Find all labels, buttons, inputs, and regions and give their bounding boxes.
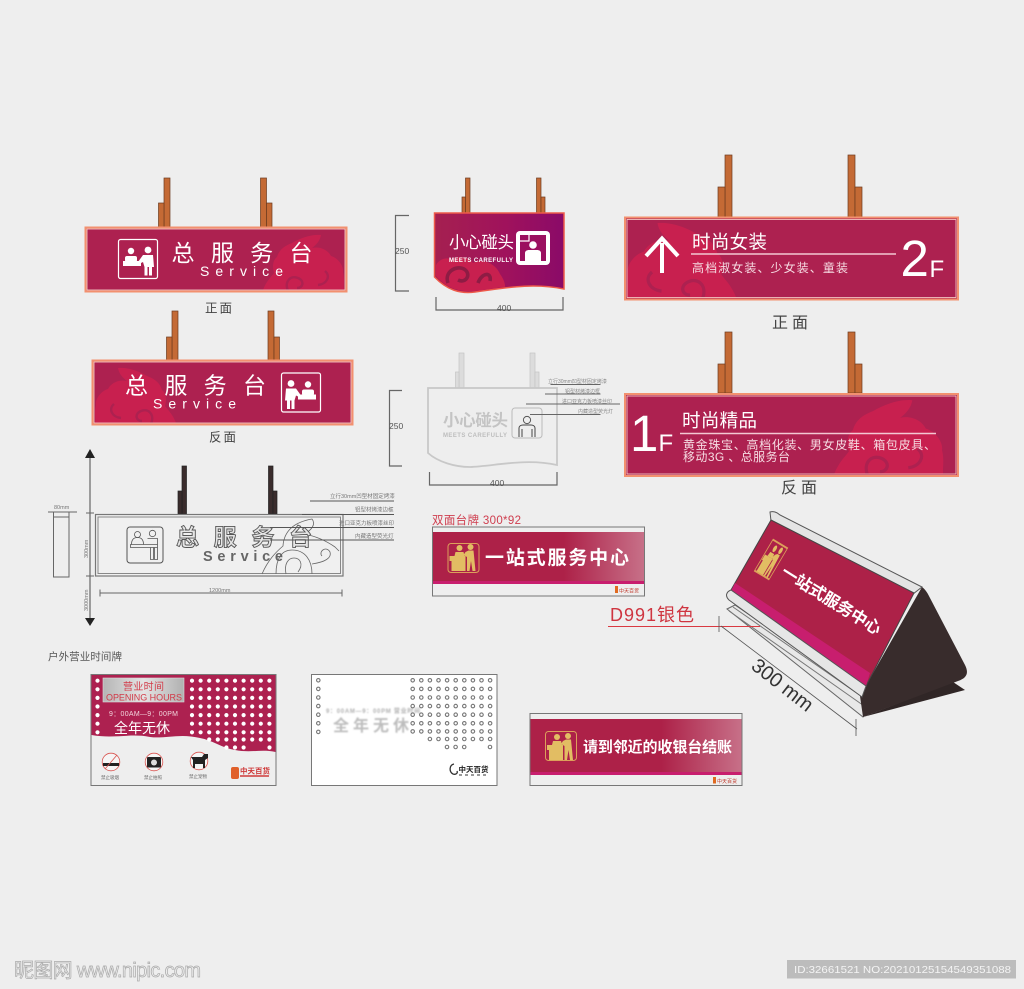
cloud outline: [262, 519, 339, 574]
base rails: [727, 605, 875, 717]
width bracket: [430, 472, 557, 485]
table sign text: 一站式服务中心: [485, 547, 629, 569]
width label: 400: [497, 303, 511, 313]
height label: 250: [389, 421, 403, 431]
red area: [92, 675, 276, 752]
red band: [433, 532, 644, 581]
frame: [432, 527, 644, 596]
callout 1: 立行30mm凹型材固定烤漆: [330, 492, 395, 500]
icon: bump head: [516, 231, 550, 265]
board: [91, 674, 276, 786]
back caption: 反面: [781, 479, 817, 497]
sign board: [86, 228, 346, 292]
outlined heading: 总服务台: [176, 524, 312, 550]
panel: table sign nearest cashier: [530, 714, 742, 786]
silver title box: [103, 678, 184, 702]
posts: [456, 353, 539, 388]
posts: [158, 178, 272, 227]
hollow dots: [318, 680, 493, 747]
heading: outdoor hours sign: 户外营业时间牌: [48, 650, 122, 663]
logo: [713, 777, 737, 785]
no camera label: 禁止拍照: [144, 774, 162, 781]
sign title: 小心碰头: [449, 233, 514, 252]
watermark: image id: [787, 960, 1016, 978]
logo: [231, 766, 270, 779]
dimension 3000mm: 3000mm: [84, 589, 90, 611]
outline board: [96, 514, 343, 576]
icon: outline bump: [512, 408, 542, 438]
faded hours: 9：00AM—9：00PM 营业时间: [326, 707, 420, 715]
panel: triangular table sign 3D: [608, 512, 967, 736]
floor letter: F: [658, 430, 673, 457]
sign heading: 总服务台: [172, 240, 312, 266]
hours title english: OPENING HOURS: [106, 692, 182, 702]
outline title: 小心碰头: [443, 411, 508, 430]
sign board: [92, 360, 352, 424]
icon: up arrow: [646, 238, 678, 273]
height arrow: [85, 449, 95, 626]
logo: [615, 586, 639, 594]
floor number: 1: [630, 405, 658, 462]
floor title: 时尚女装: [692, 232, 767, 252]
outline subtitle: MEETS CAREFULLY: [443, 433, 507, 439]
board: [312, 674, 497, 786]
front caption: 正面: [205, 302, 232, 316]
logo: 中天百货: [458, 764, 489, 774]
red leader line: [608, 626, 760, 628]
logo: [450, 764, 489, 775]
icon: outline service desk: [127, 527, 163, 563]
panel: mind your head sign: [395, 178, 564, 313]
red face: [731, 520, 914, 686]
cloud pattern: [95, 368, 176, 424]
icon: service desk gold: [448, 544, 479, 572]
wavy board: [434, 213, 564, 292]
posts: [178, 466, 277, 514]
panel: outdoor sign reverse outline: [312, 674, 497, 786]
callout 3: 进口亚克力板喷漆丝印: [562, 398, 612, 405]
callout 2: 铝型材烤漆边框: [565, 388, 600, 395]
width label: 400: [490, 478, 504, 488]
width bracket: [436, 297, 563, 310]
logo: 中天百货: [717, 778, 737, 785]
dark side: [860, 587, 967, 717]
outlined subtitle: Service: [203, 549, 283, 565]
hours: 9：00AM—9：00PM: [109, 711, 178, 718]
callout 3: 进口亚克力板喷漆丝印: [339, 519, 395, 527]
foot: [863, 682, 965, 717]
icon: no smoking: [102, 753, 120, 771]
wavy outline: [428, 388, 557, 467]
side view: [48, 512, 77, 577]
callout 4: 内藏造型荧光灯: [355, 532, 394, 540]
posts: [718, 155, 862, 217]
red band: [530, 719, 742, 772]
side dimension: 80mm: [54, 505, 70, 511]
posts: [462, 178, 545, 213]
silver colour label: D991银色: [610, 605, 694, 625]
logo: 中天百货: [240, 766, 270, 776]
icon: service desk: [118, 240, 158, 278]
icon: no pets: [190, 752, 208, 770]
floor title: 时尚精品: [682, 410, 757, 431]
no pets label: 禁止宠物: [189, 773, 207, 780]
frame: [530, 714, 742, 786]
floor description line 2: 移动3G 、总服务台: [683, 449, 790, 464]
sign board: [625, 394, 958, 476]
panel: technical drawing of service sign: [48, 449, 395, 626]
floor number: 2: [900, 230, 929, 287]
cloud pattern: [626, 223, 736, 299]
callout lines: [526, 384, 620, 414]
height bracket: [396, 216, 409, 291]
posts: [718, 332, 862, 393]
cloud pattern: [263, 235, 344, 291]
callout lines: [270, 501, 394, 540]
sign heading: 总服务台: [125, 372, 266, 398]
cloud pattern: [436, 257, 505, 292]
cloud pattern: [834, 400, 943, 476]
logo: 中天百货: [619, 588, 639, 594]
faded all year: 全年无休: [333, 716, 409, 735]
floor letter: F: [930, 256, 944, 283]
hours title: 营业时间: [123, 680, 164, 693]
width dimension: [100, 590, 342, 596]
top silver strip: [770, 512, 922, 594]
front caption: 正面: [772, 315, 808, 332]
icon: service desk gold: [546, 732, 576, 760]
width label: 1200mm: [209, 588, 231, 594]
all year: 全年无休: [114, 720, 170, 736]
rule: [680, 432, 936, 434]
tilted text: 一站式服务中心: [778, 562, 885, 639]
pink stripe: [433, 581, 644, 584]
back caption: 反面: [209, 430, 236, 444]
dimension line: [719, 616, 857, 736]
callout 1: 立行30mm凹型材固定烤漆: [548, 378, 607, 385]
watermark: nipic: 昵图网 www.nipic.com: [14, 960, 201, 982]
dimension label: 300 mm: [747, 655, 817, 716]
table sign text: 请到邻近的收银台结账: [583, 738, 732, 756]
callout 4: 内藏造型荧光灯: [578, 408, 613, 415]
callout 2: 铝型材烤漆边框: [355, 506, 394, 514]
panel: mind your head outline drawing: [389, 353, 620, 488]
panel: service desk sign back: [92, 311, 352, 424]
sign subtitle: Service: [200, 263, 283, 279]
heading: double-sided table sign: 双面台牌 300*92: [432, 513, 521, 527]
sign subtitle: MEETS CAREFULLY: [449, 258, 513, 264]
panel: floor sign 2F: [625, 155, 958, 300]
lower silver strip: [727, 590, 866, 697]
height bracket: [390, 390, 402, 466]
white dots: [98, 681, 272, 748]
no smoking label: 禁止吸烟: [101, 774, 119, 781]
icon: no camera: [145, 753, 163, 771]
floor description: 高档淑女装、少女装、童装: [692, 260, 848, 275]
icon: service desk: [282, 373, 320, 412]
pink stripe: [530, 772, 742, 775]
panel: outdoor opening hours sign: [91, 674, 276, 786]
panel: service desk sign front: [86, 178, 346, 292]
sign subtitle: Service: [153, 396, 236, 412]
panel: table sign flat: [432, 527, 644, 596]
height label: 250: [395, 246, 409, 256]
sign board: [625, 218, 958, 300]
icon: gold tilted: [755, 540, 787, 579]
rule: [691, 253, 896, 255]
watermark: image id: ID:32661521 NO:20210125154549351088: [794, 964, 1011, 976]
magenta stripe: [731, 583, 870, 686]
posts: [166, 311, 280, 360]
panel: floor sign 1F: [625, 332, 958, 476]
dimension 300mm: 300mm: [84, 539, 90, 558]
floor description: 黄金珠宝、高档化装、男女皮鞋、箱包皮具、: [683, 437, 936, 452]
